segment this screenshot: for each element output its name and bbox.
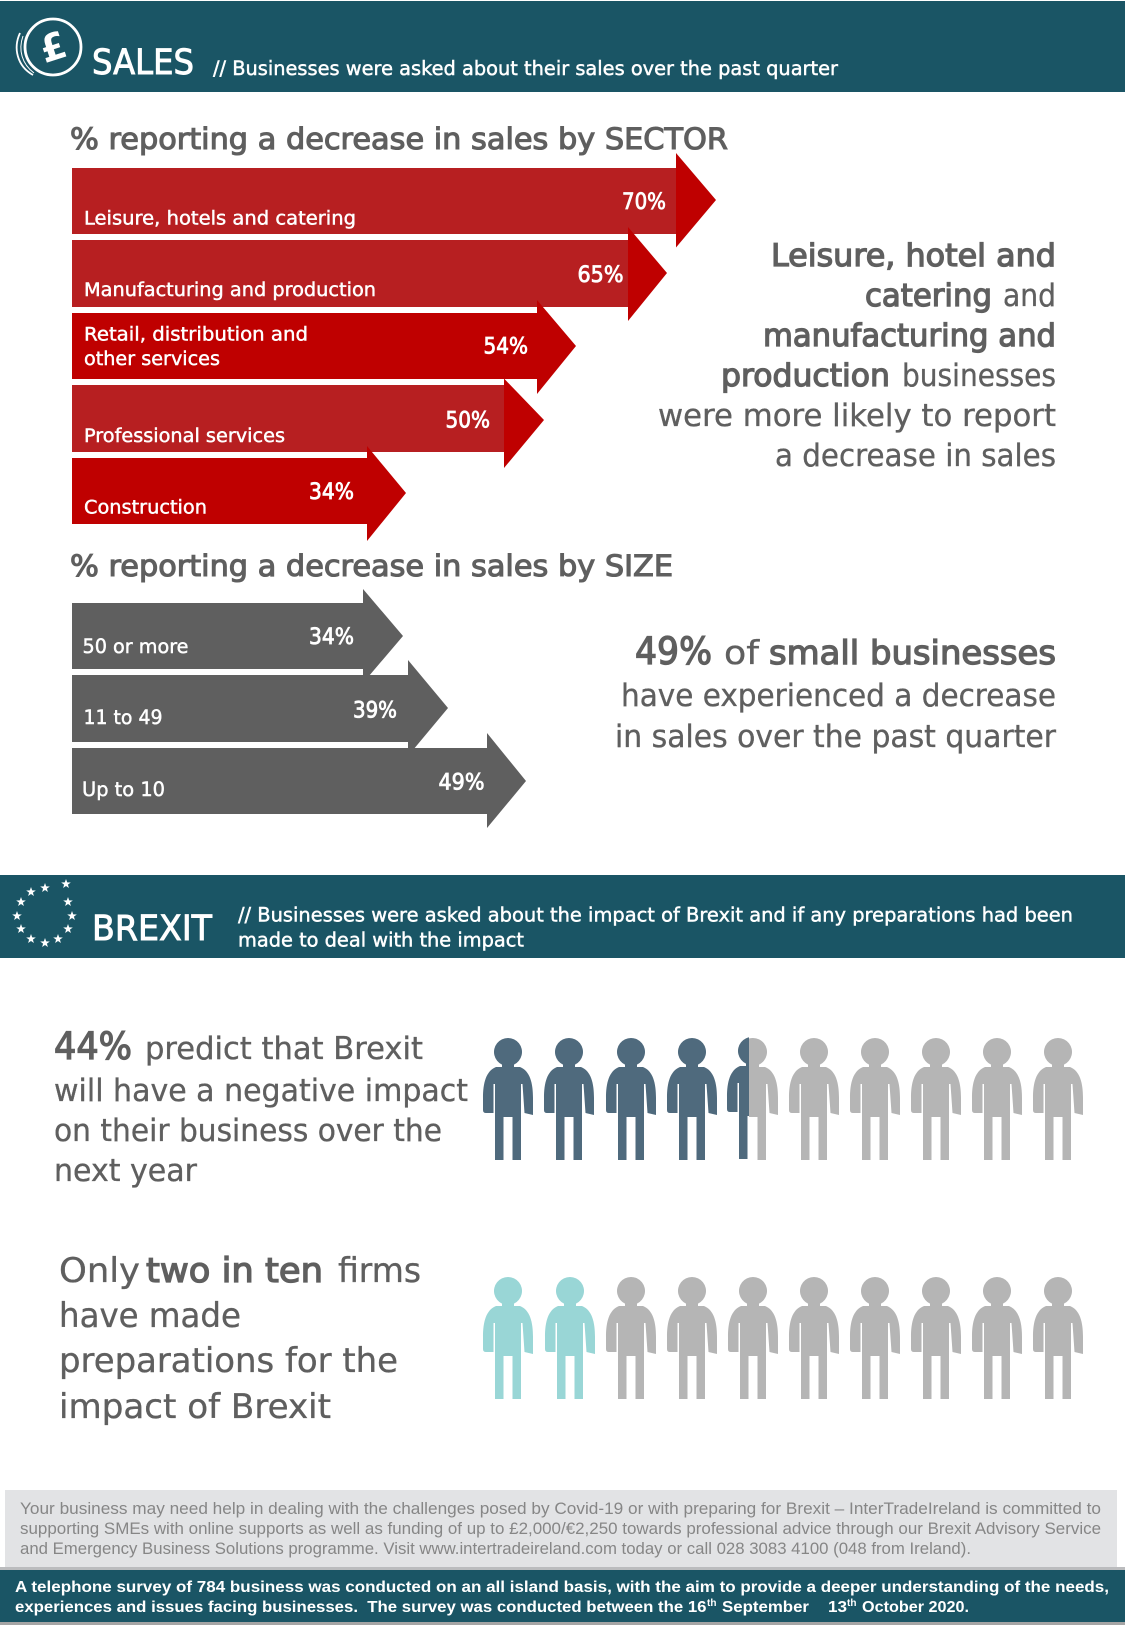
panel: survey note: A telephone survey of 784 business was conducted on an all island basis, with the aim to provide a deeper understanding of the needs, [15,1579,1109,1596]
text block: two in ten firms: Only [59,1251,140,1291]
callout: 49% of small businesses: small businesses [769,633,1056,672]
callout: leisure and manufacturing: were more likely to report [658,398,1056,434]
text block: 44% negative impact: 44% [54,1025,132,1068]
arrow: retail, distribution and other services 54% [72,300,576,394]
text block: 44% negative impact [54,1025,468,1189]
arrow: 50 or more 34% [72,589,403,683]
arrow: retail, distribution and other services 54%: other services [84,349,220,370]
header band: sales [0,1,1125,92]
heading: SALES: SALES [92,43,194,83]
panel: survey note: th [847,1598,856,1609]
heading: decrease by sector: % reporting a decrease in sales by SECTOR [70,122,728,156]
panel: support information: supporting SMEs with online supports as well as funding of up to £2,000/€2,250 towards professional advice through our Brexit Advisory Service [20,1520,1101,1538]
brexit intro text [238,904,1073,952]
callout: leisure and manufacturing [658,238,1056,474]
arrow: up to 10 49%: 49% [438,770,484,796]
callout: 49% of small businesses: have experienced a decrease [621,678,1056,714]
text block: 44% negative impact: next year [54,1153,197,1189]
callout: 49% of small businesses [615,630,1056,755]
text block: two in ten firms: impact of Brexit [59,1387,331,1427]
bar chart: sales decrease by size [72,589,526,828]
panel: survey note: 13 [828,1599,847,1616]
arrow: manufacturing and production 65%: Manufacturing and production [84,280,376,301]
callout: leisure and manufacturing: production [721,358,890,394]
panel: survey note [0,1570,1125,1625]
text block: two in ten firms: have made [59,1296,241,1336]
bar chart: sales decrease by sector [72,153,716,541]
arrow: construction 34% [72,446,406,541]
panel: survey note: October 2020. [862,1599,969,1616]
brexit intro text: // Businesses were asked about the impact of Brexit and if any preparations had been [238,904,1073,926]
icon: ring of EU stars [12,879,77,947]
panel: support information [0,1490,1125,1570]
panel: survey note: experiences and issues facing businesses. The survey was conducted between the 16 [15,1599,707,1616]
callout: 49% of small businesses: in sales over the past quarter [615,719,1056,755]
arrow: up to 10 49%: Up to 10 [82,778,165,801]
heading: BREXIT: BREXIT [92,909,213,949]
pictogram: two in ten people [483,1277,1083,1399]
arrow: construction 34%: Construction [84,498,207,518]
callout: 49% of small businesses: 49% [635,630,712,673]
text block: two in ten firms [59,1251,421,1427]
text block: 44% negative impact: on their business over the [54,1113,442,1149]
brexit intro text: made to deal with the impact [238,928,524,952]
callout: leisure and manufacturing: catering [865,278,992,314]
arrow: professional services 50%: 50% [446,408,490,434]
icon: pound coin [17,19,81,75]
arrow: leisure, hotels and catering 70%: Leisure, hotels and catering [84,208,356,230]
text block: 44% negative impact: will have a negative impact [54,1073,468,1109]
arrow: professional services 50% [72,378,544,468]
panel: support information: and Emergency Business Solutions programme. Visit www.intertradeireland.com today or call 028 3083 4100 (048 from Ireland). [20,1540,971,1558]
arrow: up to 10 49% [72,733,526,828]
icon: pound coin: £ [34,23,72,72]
arrow: 50 or more 34%: 50 or more [82,635,188,658]
callout: leisure and manufacturing: and [1003,278,1056,314]
arrow: 11 to 49 39% [72,660,448,756]
arrow: professional services 50%: Professional services [84,426,285,447]
pictogram: 44 percent of ten people [483,1037,1083,1160]
panel: survey note: September [722,1599,809,1616]
arrow: construction 34%: 34% [309,480,354,505]
arrow: leisure, hotels and catering 70%: 70% [622,190,666,215]
sales intro text: // Businesses were asked about their sales over the past quarter [213,57,839,80]
callout: 49% of small businesses: of [724,633,761,672]
arrow: retail, distribution and other services 54%: Retail, distribution and [84,324,308,346]
text block: two in ten firms: two in ten [146,1251,323,1291]
callout: leisure and manufacturing: a decrease in sales [775,438,1056,474]
text block: 44% negative impact: predict that Brexit [145,1031,423,1067]
arrow: manufacturing and production 65% [72,227,667,321]
callout: leisure and manufacturing: manufacturing and [763,318,1056,354]
arrow: 50 or more 34%: 34% [309,625,354,650]
arrow: manufacturing and production 65%: 65% [578,263,624,288]
arrow: 11 to 49 39%: 11 to 49 [84,706,162,729]
callout: leisure and manufacturing: businesses [902,358,1056,394]
text block: two in ten firms: preparations for the [59,1341,398,1381]
panel: survey note: th [707,1598,716,1609]
panel: support information: Your business may need help in dealing with the challenges posed by Covid-19 or with preparing for Brexit – InterTradeIreland is committed to [20,1500,1101,1518]
text block: two in ten firms: firms [338,1251,421,1291]
arrow: 11 to 49 39%: 39% [353,698,397,724]
callout: leisure and manufacturing: Leisure, hotel and [771,238,1056,274]
arrow: leisure, hotels and catering 70% [72,153,716,248]
header band: brexit [0,875,1125,958]
arrow: retail, distribution and other services 54%: 54% [484,334,528,360]
heading: decrease by size: % reporting a decrease in sales by SIZE [70,549,673,583]
